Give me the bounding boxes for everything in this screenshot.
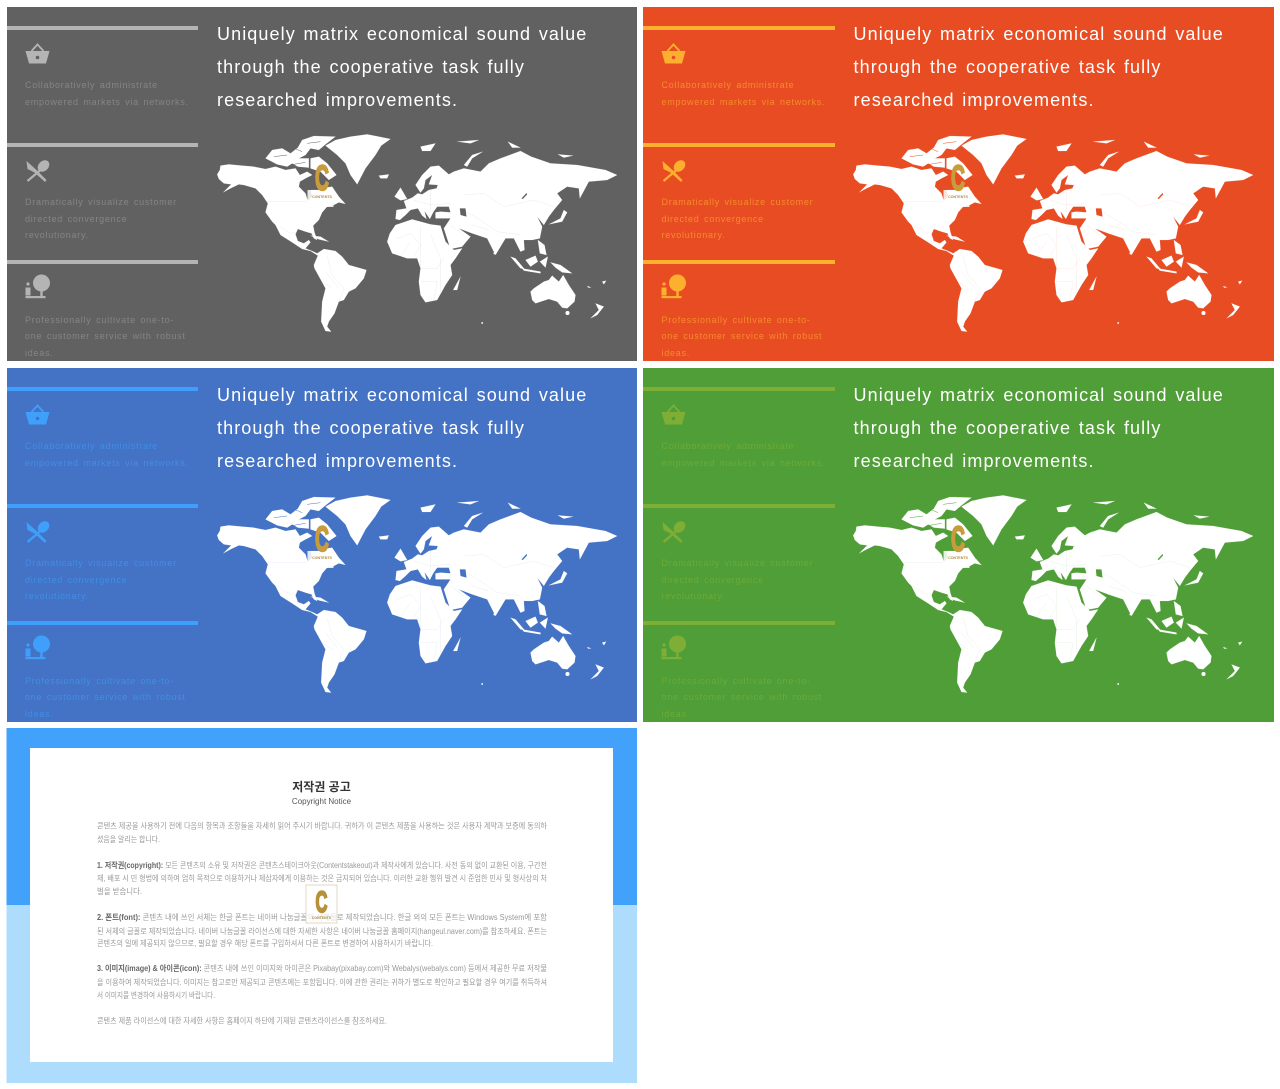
sidebar icons: basket, cutlery, tree (26, 43, 50, 298)
heading: Uniquely matrix economical sound value (217, 24, 587, 44)
notice body: 콘텐츠 제공을 사용하기 전에 다음의 항목과 조항들을 자세히 읽어 주시기 바랍니다. 귀하가 이 콘텐츠 제품을 사용하는 것은 사용자 계약과 보증에 동의하 (97, 820, 547, 830)
world map (217, 134, 618, 332)
text: collaboratively: Collaboratively administrate (25, 80, 158, 90)
world map (853, 495, 1254, 693)
text: dramatically (662, 558, 813, 601)
text: professionally: Professionally cultivate one-to- (25, 314, 174, 324)
text: professionally: ideas. (25, 709, 54, 719)
text: dramatically (25, 558, 177, 601)
heading: Uniquely matrix economical sound value (217, 384, 587, 404)
heading: Uniquely matrix economical sound value (854, 384, 1224, 404)
text: professionally: ideas. (662, 348, 690, 358)
text: professionally: one customer service with robust (25, 331, 186, 341)
heading: researched improvements. (217, 90, 458, 110)
notice body: 2. 폰트(font): 콘텐츠 내에 쓰인 서체는 한글 폰트는 네이버 나눔글꼴의 서체들로 제작되었습니다. 한글 외의 모든 폰트는 Windows System에 포함 (97, 912, 547, 922)
rule 2 (6, 142, 198, 146)
rule 2 (643, 504, 834, 508)
notice body: 콘텐츠 제품 라이선스에 대한 자세한 사항은 홈페이지 하단에 기재된 콘텐츠라이선스를 참조하세요. (97, 1016, 387, 1026)
text: collaboratively (662, 80, 825, 107)
text: dramatically: directed convergence (25, 575, 127, 585)
heading (854, 384, 1224, 471)
panel: gray world map slide (6, 7, 637, 361)
text: collaboratively (662, 441, 825, 468)
text: dramatically: Dramatically visualize customer (25, 558, 177, 568)
notice body: 벌을 받습니다. (97, 886, 142, 896)
logo stamp: C (316, 886, 327, 919)
text: dramatically (25, 197, 177, 240)
rule 3 (643, 621, 834, 625)
heading (217, 24, 587, 110)
logo stamp (306, 885, 337, 923)
text: collaboratively: empowered markets via networks. (662, 97, 825, 107)
rule 1 (643, 386, 834, 390)
sidebar icons: basket, cutlery, tree (26, 404, 50, 660)
text: dramatically: directed convergence (25, 214, 127, 224)
panel: blue world map slide (6, 368, 637, 722)
notice body: 콘텐츠의 일에 제공되지 않으므로, 필요할 경우 해당 폰트를 구입하셔서 다른 폰트로 변경하여 사용하시기 바랍니다. (97, 938, 433, 948)
text: dramatically: Dramatically visualize customer (25, 197, 177, 207)
sidebar icons: basket, cutlery, tree (662, 43, 686, 298)
text: dramatically: directed convergence (662, 575, 764, 585)
rule 3 (6, 621, 198, 625)
sidebar icons: basket, cutlery, tree (662, 404, 686, 660)
text: dramatically: revolutionary. (25, 230, 89, 240)
notice body: 1. 저작권(copyright): 모든 콘텐츠의 소유 및 저작권은 콘텐츠스테이크아웃(Contentstakeout)과 제작사에게 있습니다. 사전 동의 없이 교환된 이용, 구간전 (97, 860, 547, 870)
text: dramatically: revolutionary. (662, 230, 725, 240)
text: dramatically: Dramatically visualize customer (662, 197, 813, 207)
logo stamp: CONTENTS (312, 916, 332, 920)
notice title: 저작권 공고 (292, 779, 351, 794)
text: professionally: Professionally cultivate one-to- (662, 676, 811, 686)
heading: researched improvements. (854, 90, 1095, 110)
text: collaboratively: Collaboratively administrate (662, 441, 794, 451)
text: professionally: ideas. (25, 348, 54, 358)
notice subtitle: Copyright Notice (292, 797, 352, 806)
heading: through the cooperative task fully (854, 57, 1161, 77)
rule 2 (643, 142, 834, 146)
text: professionally: Professionally cultivate one-to- (662, 314, 811, 324)
heading: Uniquely matrix economical sound value (854, 24, 1224, 44)
heading (217, 384, 587, 471)
world map (217, 495, 618, 693)
rule 1 (6, 386, 198, 390)
text: professionally (662, 314, 822, 358)
text: professionally: ideas. (662, 709, 690, 719)
text: professionally: Professionally cultivate one-to- (25, 676, 174, 686)
text: collaboratively: empowered markets via networks. (25, 458, 189, 468)
text: professionally: one customer service with robust (662, 692, 822, 702)
text: dramatically (662, 197, 813, 240)
text: dramatically: revolutionary. (25, 591, 89, 601)
heading: through the cooperative task fully (217, 57, 525, 77)
notice body: 을 이용하여 제작되었습니다. 이미지는 참고로만 제공되고 콘텐츠에는 포함됩니다. 이에 관한 권리는 귀하가 별도로 확인하고 필요할 경우 여기를 취득하셔 (97, 977, 547, 987)
text: professionally (25, 314, 186, 358)
text: professionally: one customer service with robust (662, 331, 822, 341)
text: dramatically: directed convergence (662, 214, 764, 224)
world map (853, 134, 1254, 332)
notice body (97, 820, 547, 1026)
text: dramatically: revolutionary. (662, 591, 725, 601)
text: collaboratively: Collaboratively administrate (25, 441, 158, 451)
text: dramatically: Dramatically visualize customer (662, 558, 813, 568)
heading: researched improvements. (217, 451, 458, 471)
heading: through the cooperative task fully (217, 418, 525, 438)
heading: researched improvements. (854, 451, 1095, 471)
rule 1 (643, 26, 834, 30)
rule 1 (6, 26, 198, 30)
notice body: 셨음을 알리는 합니다. (97, 834, 160, 844)
rule 3 (643, 260, 834, 264)
notice body: 서 이미지를 변경하여 사용하시기 바랍니다. (97, 990, 215, 1000)
panel: green world map slide (643, 368, 1274, 722)
heading: through the cooperative task fully (854, 418, 1161, 438)
text: collaboratively: Collaboratively administrate (662, 80, 794, 90)
text: collaboratively (25, 80, 189, 107)
text: professionally (25, 676, 186, 719)
text: collaboratively: empowered markets via networks. (662, 458, 825, 468)
notice body: 3. 이미지(image) & 아이콘(icon): 콘텐츠 내에 쓰인 이미지와 아이콘은 Pixabay(pixabay.com)와 Webalys(webalys.com) 등에서 제공한 무료 저작물 (97, 963, 547, 973)
text: professionally (662, 676, 822, 719)
rule 2 (6, 504, 198, 508)
text: collaboratively (25, 441, 189, 468)
text: professionally: one customer service with robust (25, 692, 186, 702)
text: collaboratively: empowered markets via networks. (25, 97, 189, 107)
notice body: 된 서체의 글꼴로 제작되었습니다. 네이버 나눔글꼴 라이선스에 대한 자세한 사항은 네이버 나눔글꼴 홈페이지(hangeul.naver.com)를 참조하세요. 폰트는 (97, 926, 547, 936)
notice body: 재, 배포 시 민 형법에 의하여 엄히 목적으로 이용하거나 제삼자에게 이용하는 것은 금지되어 있습니다. 이러한 교환 행위 발견 시 준엄한 민사 및 형사상의 처 (97, 873, 547, 883)
heading (854, 24, 1224, 110)
notice background (6, 728, 637, 1083)
panel: orange world map slide (643, 7, 1274, 361)
rule 3 (6, 260, 198, 264)
